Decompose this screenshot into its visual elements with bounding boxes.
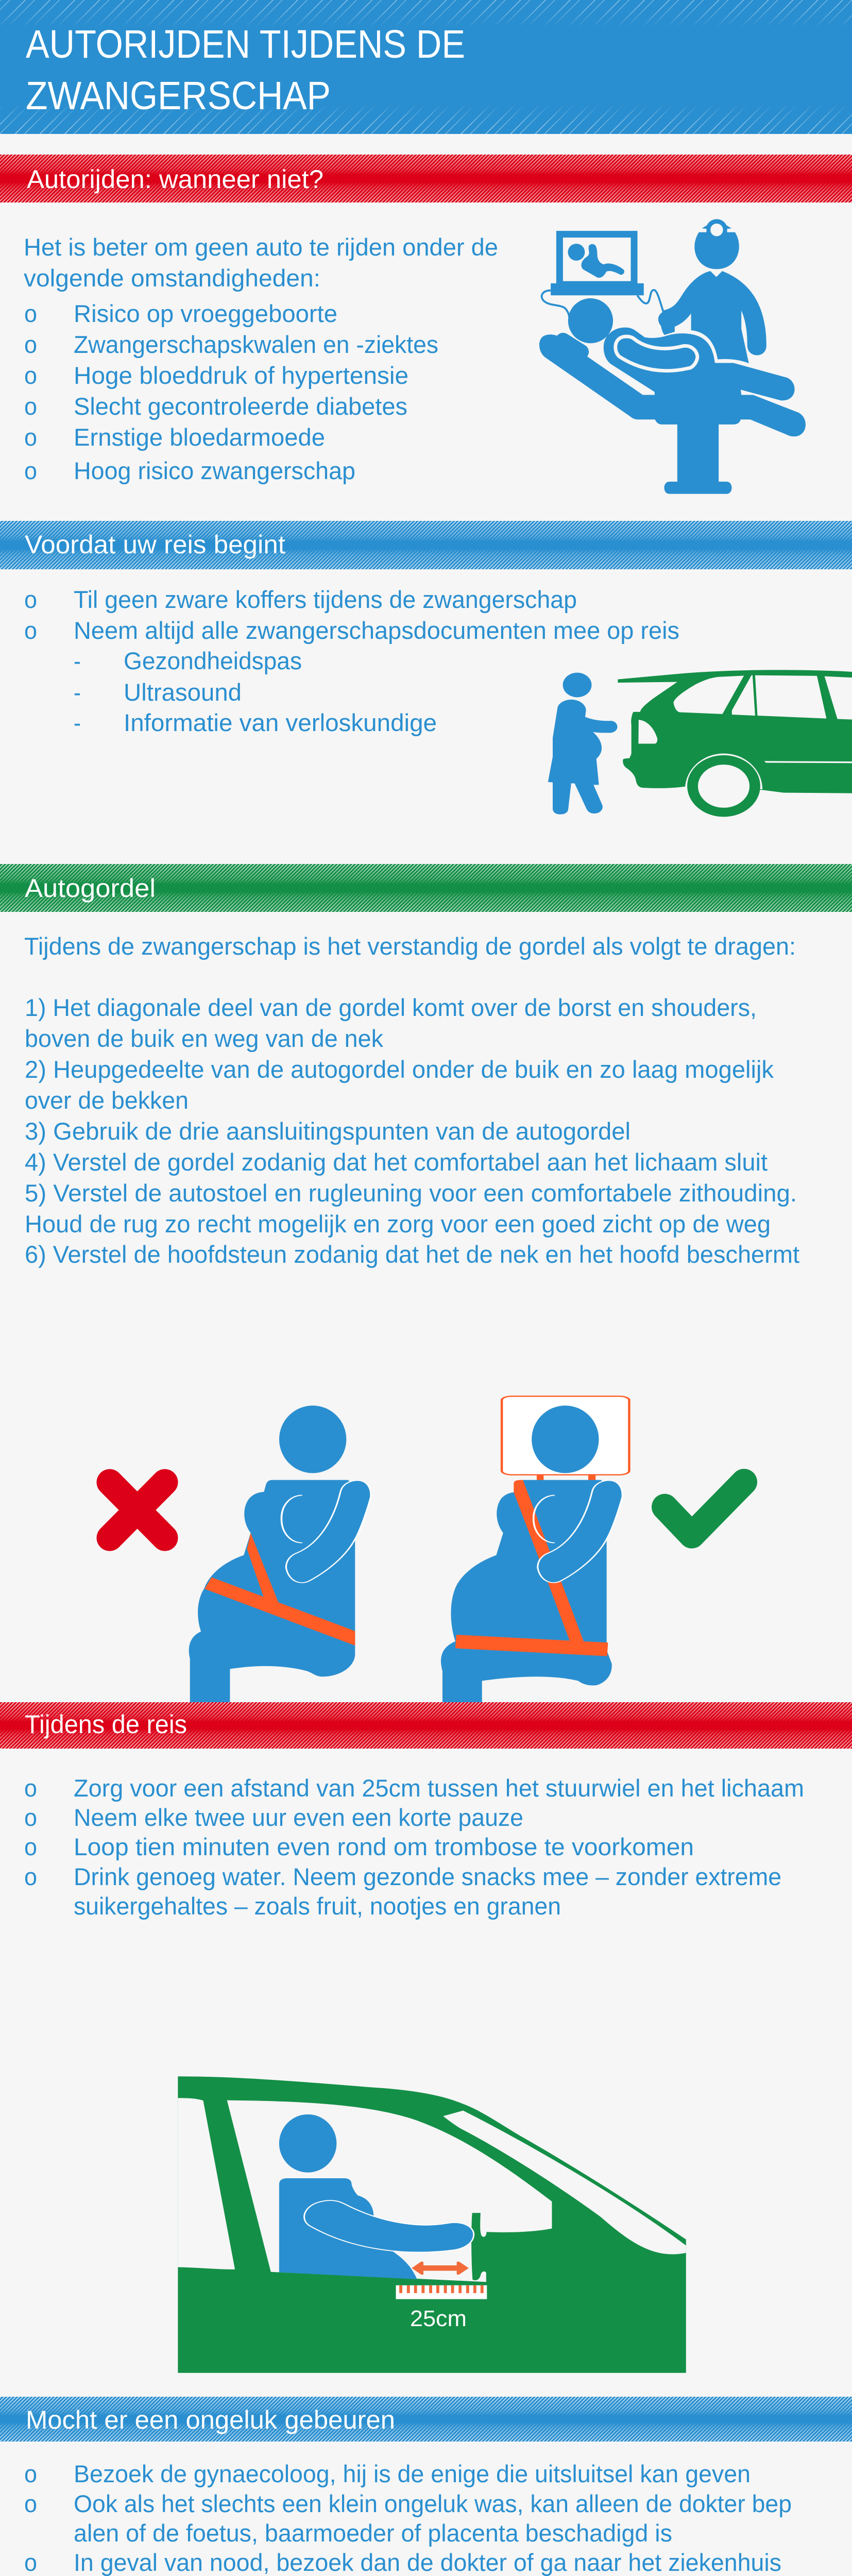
heading bar: voordat uw reis begint: Voordat uw reis begint [25, 530, 285, 559]
accident advice: In geval van nood, bezoek dan de dokter of ga naar het ziekenhuis [74, 2549, 781, 2576]
checklist: - [74, 647, 81, 674]
checklist: Gezondheidspas [124, 647, 302, 674]
risk list: o [24, 362, 37, 389]
heading bar: autogordel [0, 864, 852, 912]
travel tips [24, 1774, 804, 1920]
title banner: AUTORIJDEN TIJDENS DE [26, 22, 465, 66]
heading bar: autorijden wanneer niet: Autorijden: wanneer niet? [27, 165, 323, 194]
title banner [0, 0, 852, 134]
panel: autorijden wanneer niet [0, 155, 852, 494]
heading bar: tijdens de reis [0, 1702, 852, 1749]
checklist: - [74, 709, 81, 736]
travel tips: o [24, 1833, 37, 1860]
heading bar: ongeluk: Mocht er een ongeluk gebeuren [26, 2405, 395, 2434]
seat belt instructions: 5) Verstel de autostoel en rugleuning voor een comfortabele zithouding. [25, 1179, 797, 1207]
seat belt instructions: 4) Verstel de gordel zodanig dat het comfortabel aan het lichaam sluit [25, 1148, 768, 1176]
seat belt instructions: Tijdens de zwangerschap is het verstandig de gordel als volgt te dragen: [24, 933, 796, 960]
seat belt instructions [24, 933, 799, 1268]
travel tips: Neem elke twee uur even een korte pauze [74, 1804, 523, 1831]
risk list: Ernstige bloedarmoede [74, 423, 325, 451]
seat belt instructions: 6) Verstel de hoofdsteun zodanig dat het de nek en het hoofd beschermt [25, 1241, 799, 1268]
accident advice: o [24, 2549, 37, 2576]
risk list: Risico op vroeggeboorte [74, 300, 337, 327]
seat belt instructions: Houd de rug zo recht mogelijk en zorg voor een goed zicht op de weg [25, 1210, 771, 1238]
risk list: Zwangerschapskwalen en -ziektes [74, 331, 438, 358]
heading bar: autorijden wanneer niet [0, 155, 852, 202]
icon: ultrasound doctor and patient [539, 219, 806, 494]
travel tips: Zorg voor een afstand van 25cm tussen het stuurwiel en het lichaam [74, 1774, 804, 1802]
risk list: o [24, 423, 37, 451]
title banner: ZWANGERSCHAP [26, 74, 331, 118]
risk list: Slecht gecontroleerde diabetes [74, 393, 407, 420]
risk list: o [24, 300, 37, 327]
checklist: Neem altijd alle zwangerschapsdocumenten mee op reis [74, 617, 679, 644]
heading bar: tijdens de reis: Tijdens de reis [25, 1710, 187, 1739]
seat belt instructions: 3) Gebruik de drie aansluitingspunten van de autogordel [25, 1117, 631, 1145]
icon: red cross [110, 1482, 165, 1538]
travel tips: Drink genoeg water. Neem gezonde snacks mee – zonder extreme [74, 1863, 781, 1890]
risk list: o [24, 393, 37, 420]
heading bar: autogordel: Autogordel [25, 874, 156, 903]
travel tips: o [24, 1863, 37, 1890]
heading bar: ongeluk [0, 2397, 852, 2442]
intro text [24, 233, 498, 292]
accident advice: o [24, 2460, 37, 2487]
seat belt instructions: 2) Heupgedeelte van de autogordel onder de buik en zo laag mogelijk [25, 1056, 774, 1083]
icon: pregnant woman at car boot [548, 670, 852, 817]
panel: autogordel [0, 864, 852, 1704]
checklist: Til geen zware koffers tijdens de zwangerschap [74, 586, 577, 613]
risk list: o [24, 457, 37, 484]
figure: correct belt position [441, 1396, 629, 1704]
checklist: Ultrasound [124, 679, 242, 706]
accident advice: Bezoek de gynaecoloog, hij is de enige die uitsluitsel kan geven [74, 2460, 751, 2487]
checklist [24, 586, 679, 736]
pregnant woman [548, 673, 618, 815]
travel tips: o [24, 1804, 37, 1831]
panel: tijdens de reis [0, 1702, 852, 2373]
accident advice: o [24, 2490, 37, 2517]
risk list: o [24, 331, 37, 358]
intro text: volgende omstandigheden: [24, 264, 320, 292]
travel tips: suikergehaltes – zoals fruit, nootjes en granen [74, 1892, 561, 1920]
seat belt instructions: 1) Het diagonale deel van de gordel komt over de borst en shouders, [25, 994, 757, 1021]
accident advice: alen of de foetus, baarmoeder of placenta beschadigd is [74, 2519, 672, 2547]
checklist: - [74, 679, 81, 706]
travel tips: Loop tien minuten even rond om trombose te voorkomen [74, 1833, 694, 1860]
checklist: o [24, 617, 37, 644]
illustration: driver 25cm from steering wheel: 25cm [410, 2306, 467, 2331]
panel: voordat uw reis begint [0, 521, 852, 817]
figure: wrong belt position [189, 1405, 371, 1704]
heading bar: voordat uw reis begint [0, 521, 852, 569]
intro text: Het is beter om geen auto te rijden onder de [24, 233, 498, 261]
accident advice: Ook als het slechts een klein ongeluk was, kan alleen de dokter bep [74, 2490, 792, 2517]
seat belt instructions: over de bekken [25, 1087, 189, 1114]
risk list [24, 300, 438, 484]
travel tips: o [24, 1774, 37, 1802]
risk list: Hoge bloeddruk of hypertensie [74, 362, 408, 389]
checklist: o [24, 586, 37, 613]
icon: green check mark [664, 1482, 744, 1535]
panel: mocht er een ongeluk gebeuren [0, 2397, 852, 2576]
risk list: Hoog risico zwangerschap [74, 457, 355, 484]
checklist: Informatie van verloskundige [124, 709, 437, 736]
green car rear [618, 670, 852, 817]
seat belt instructions: boven de buik en weg van de nek [25, 1025, 383, 1052]
illustration: driver 25cm from steering wheel [178, 2076, 686, 2373]
accident advice [24, 2460, 792, 2576]
